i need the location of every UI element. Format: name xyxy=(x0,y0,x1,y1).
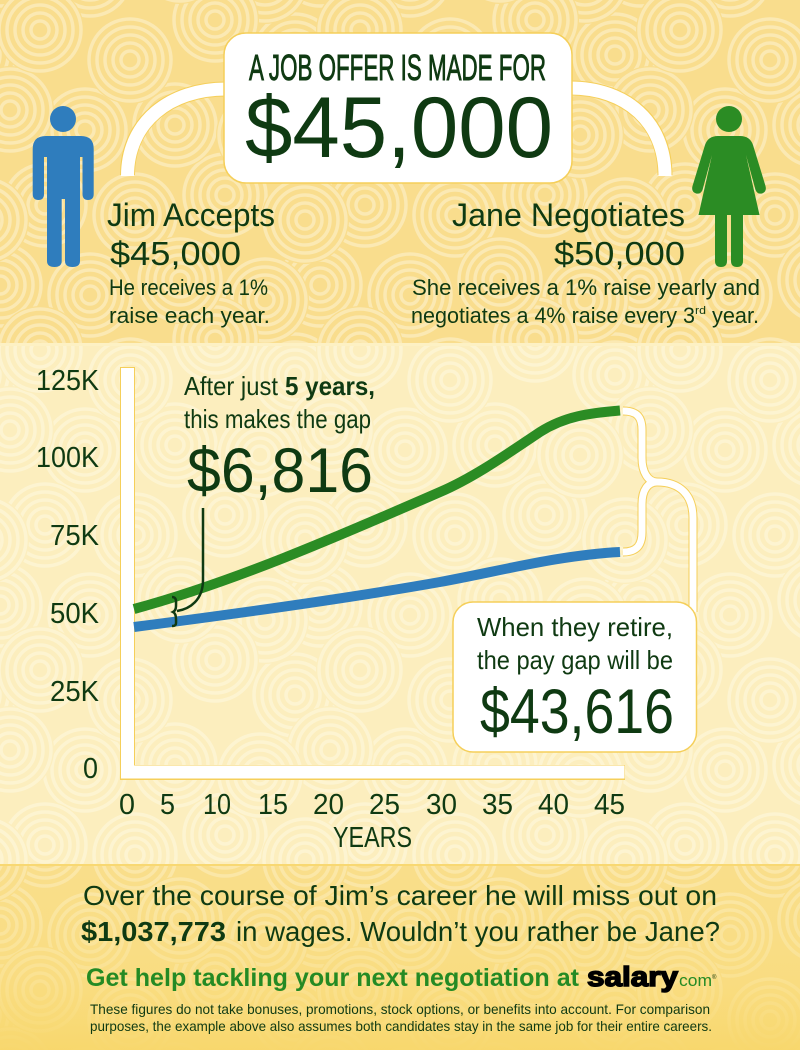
x axis labels: 0 xyxy=(119,789,135,821)
logo: salary.com: com xyxy=(679,971,712,990)
gap bracket xyxy=(172,508,203,626)
x axis labels: 10 xyxy=(203,789,231,821)
logo: salary.com xyxy=(587,961,717,992)
callout text: after just 5 years: After just xyxy=(184,371,279,401)
footer statement: in wages. Wouldn’t you rather be Jane? xyxy=(236,916,720,947)
text: Jane xyxy=(411,197,760,328)
footer statement: Over the course of Jim’s career he will miss out on xyxy=(83,880,717,911)
line: Jim salary xyxy=(134,552,620,627)
chart axes xyxy=(128,367,625,772)
headline box xyxy=(224,33,572,183)
text: Jim xyxy=(107,197,275,328)
callout text: after just 5 years: 5 years, xyxy=(285,371,375,401)
text: Jim: raise each year. xyxy=(109,303,270,328)
callout amount: $6,816 xyxy=(187,436,373,506)
logo: salary.com: salary xyxy=(587,961,678,992)
x axis labels: 25 xyxy=(369,789,400,821)
y axis labels: 125K xyxy=(36,365,100,397)
x axis labels xyxy=(119,789,625,821)
text: Jane: $50,000 xyxy=(554,235,685,272)
x axis labels: 5 xyxy=(160,789,175,821)
retirement bracket xyxy=(623,411,693,612)
x axis title: YEARS xyxy=(333,822,412,854)
line: Jane salary xyxy=(134,410,620,609)
callout: retirement gap: When they retire, xyxy=(477,612,673,642)
headline amount: $45,000 xyxy=(245,80,553,176)
text: Jane: negotiates a 4% raise every 3 xyxy=(411,303,695,328)
headline: a job offer is made for: A JOB OFFER IS MADE FOR xyxy=(249,47,546,88)
callout: retirement gap xyxy=(453,602,696,752)
connector arcs xyxy=(128,88,665,176)
call to action: Get help tackling your next negotiation at xyxy=(86,964,580,992)
callout: retirement gap: $43,616 xyxy=(480,677,674,747)
y axis labels: 75K xyxy=(50,520,100,552)
callout text: after just 5 years xyxy=(184,371,375,434)
disclaimer: These figures do not take bonuses, promotions, stock options, or benefits into account. For comparison xyxy=(90,1001,710,1017)
panel: footer background xyxy=(0,864,800,1050)
callout text: after just 5 years: this makes the gap xyxy=(184,404,371,434)
x axis labels: 45 xyxy=(594,789,625,821)
disclaimer: purposes, the example above also assumes both candidates stay in the same job for their entire careers. xyxy=(90,1018,712,1034)
x axis labels: 35 xyxy=(482,789,513,821)
x axis labels: 30 xyxy=(426,789,457,821)
text: Jim: $45,000 xyxy=(110,235,241,272)
text: Jane: Jane Negotiates xyxy=(452,197,685,233)
panel: chart background xyxy=(0,343,800,865)
logo: salary.com: ® xyxy=(712,974,717,981)
text: Jane: rd xyxy=(695,305,706,317)
icon: Jim xyxy=(33,106,94,267)
y axis labels: 100K xyxy=(36,442,100,474)
footer statement xyxy=(81,880,720,947)
y axis labels: 0 xyxy=(83,753,98,785)
footer statement: $1,037,773 xyxy=(81,916,226,947)
callout: 5 year gap xyxy=(172,371,375,626)
text: Jim: Jim Accepts xyxy=(107,197,275,233)
text: Jim: He receives a 1% xyxy=(109,275,268,300)
y axis labels: 25K xyxy=(50,676,100,708)
text: Jane: She receives a 1% raise yearly and xyxy=(412,275,760,300)
y axis labels: 50K xyxy=(50,598,100,630)
callout: retirement gap: the pay gap will be xyxy=(477,645,673,675)
x axis labels: 40 xyxy=(538,789,569,821)
x axis labels: 20 xyxy=(313,789,344,821)
x axis labels: 15 xyxy=(258,789,288,821)
y axis labels xyxy=(36,365,100,785)
disclaimer xyxy=(90,1001,712,1034)
chart axes: white xyxy=(128,368,624,772)
icon: Jane xyxy=(692,106,766,267)
text: Jane: year. xyxy=(712,303,759,328)
